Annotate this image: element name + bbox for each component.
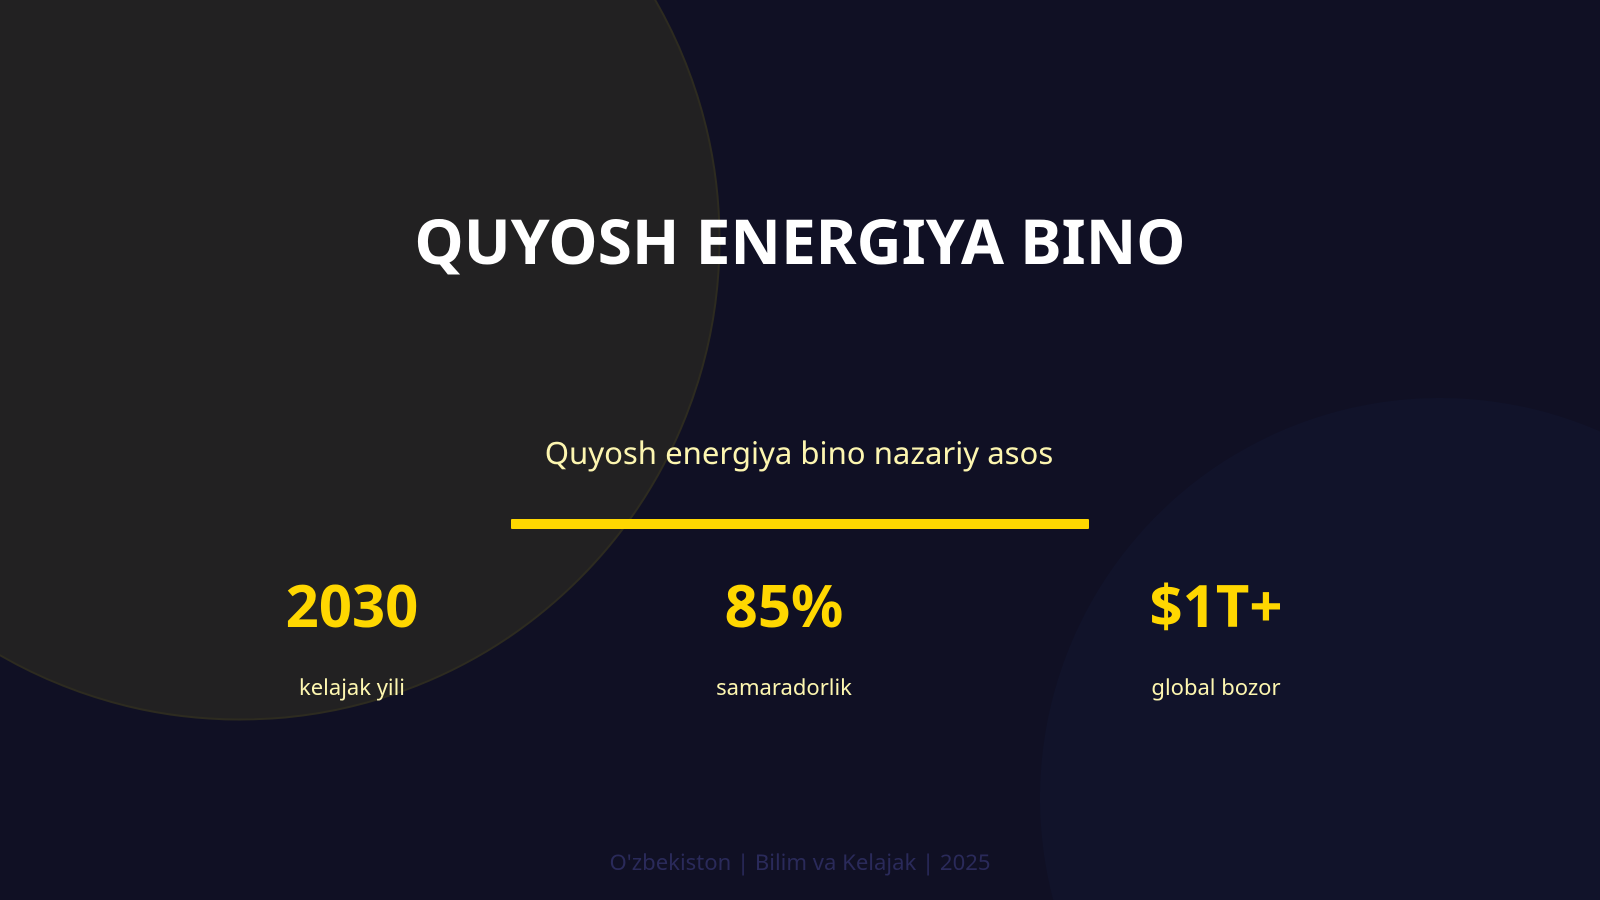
decorative gold circle, top left [0,0,720,720]
stat label: kelajak yili [299,672,405,702]
decorative navy circle, bottom right [1040,398,1600,900]
stat: 2030 kelajak yili [286,565,418,702]
subtitle: Quyosh energiya bino nazariy asos [545,432,1053,474]
stat: 85% samaradorlik [716,565,852,702]
title: QUYOSH ENERGIYA BINO [414,199,1186,283]
stat label: global bozor [1151,672,1281,702]
stat label: samaradorlik [716,672,852,702]
stat value: 2030 [286,565,418,644]
accent bar [511,519,1089,529]
stat value: 85% [725,565,843,644]
footer: O'zbekiston | Bilim va Kelajak | 2025 [610,847,990,877]
stat value: $1T+ [1150,565,1282,644]
stat: $1T+ global bozor [1150,565,1282,702]
